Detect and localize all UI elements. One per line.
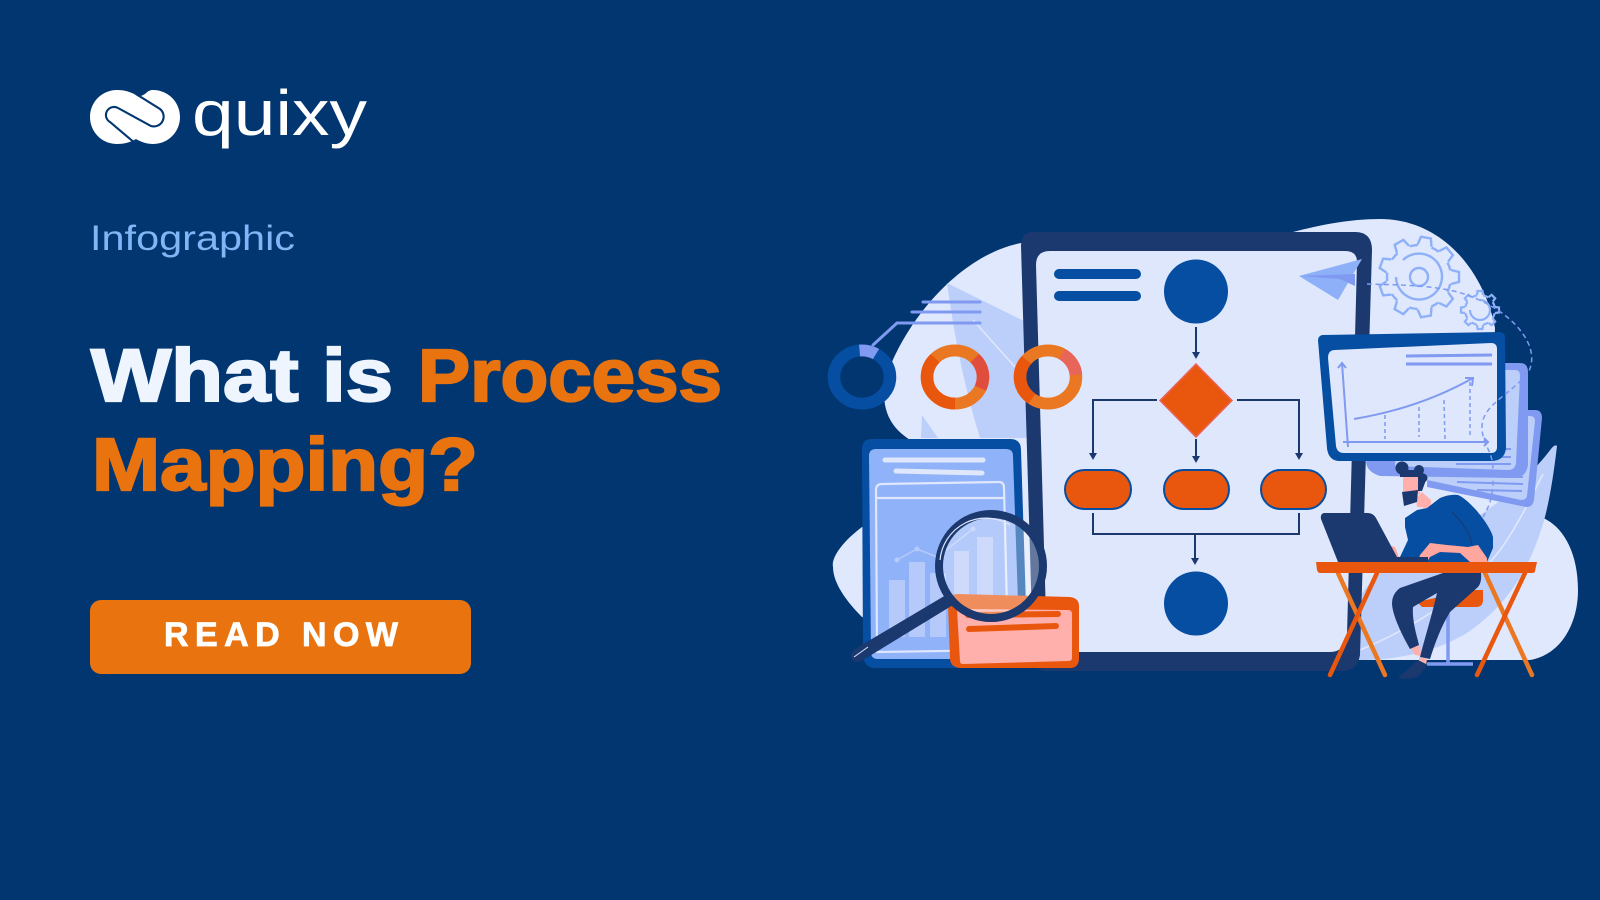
donut charts and leader lines bbox=[832, 302, 1087, 415]
beard bbox=[1402, 490, 1418, 506]
desk bbox=[1316, 562, 1537, 675]
flow end bbox=[1164, 572, 1228, 636]
logo: quixy bbox=[90, 77, 367, 149]
card: back right upper bbox=[1366, 363, 1528, 478]
gear: large bbox=[1379, 236, 1459, 318]
label: Infographic: Infographic bbox=[90, 219, 295, 258]
donut: orange salmon bbox=[1009, 340, 1087, 414]
panel: monitor line chart bbox=[1323, 337, 1501, 456]
leaf: upper left bbox=[921, 283, 1030, 438]
text lines bbox=[1054, 269, 1141, 301]
shoe bbox=[1398, 660, 1426, 679]
donut: blue bbox=[832, 348, 892, 406]
panel: left report tablet bbox=[862, 439, 1028, 668]
icon: quixy symbol bbox=[90, 90, 180, 144]
illustration: process mapping bbox=[832, 219, 1578, 679]
connectors bbox=[1093, 327, 1299, 558]
donut: orange red bbox=[915, 339, 995, 415]
icon: magnifying glass bbox=[851, 514, 1043, 662]
title: What is bbox=[91, 334, 393, 417]
flow start bbox=[1164, 260, 1228, 324]
title bbox=[91, 334, 722, 506]
leader lines bbox=[873, 302, 980, 345]
paper plane bbox=[1299, 259, 1362, 300]
face bbox=[1403, 477, 1420, 494]
decision diamond bbox=[1160, 364, 1232, 437]
flow pills bbox=[1065, 470, 1326, 509]
axes bbox=[1338, 363, 1488, 447]
card: orange note bbox=[948, 594, 1079, 668]
shirt bbox=[1397, 495, 1493, 562]
chart heading lines bbox=[1406, 355, 1492, 364]
wordmark: quixy bbox=[192, 77, 367, 149]
report frame bbox=[876, 482, 1008, 652]
ankles bbox=[1411, 645, 1427, 666]
button: read now bbox=[90, 600, 471, 674]
person at desk bbox=[1388, 462, 1493, 679]
hair bbox=[1396, 462, 1428, 491]
bar chart bbox=[889, 537, 993, 637]
legs bbox=[1392, 573, 1481, 659]
title: Process bbox=[418, 334, 722, 417]
background cloud bbox=[833, 219, 1578, 660]
report heading lines bbox=[885, 460, 983, 473]
card: back right lower bbox=[1427, 410, 1542, 507]
title: Mapping? bbox=[92, 423, 478, 506]
chair bbox=[1417, 590, 1483, 664]
panel: tablet flowchart bbox=[1021, 232, 1372, 671]
leaf: right bbox=[1360, 445, 1557, 660]
gear: small bbox=[1461, 291, 1499, 329]
trend line bbox=[897, 529, 973, 560]
button: read now: READ NOW bbox=[164, 616, 399, 654]
growth curve bbox=[1354, 378, 1473, 419]
dashed route bbox=[1367, 284, 1532, 517]
hand bbox=[1388, 545, 1399, 557]
laptop bbox=[1321, 513, 1428, 562]
arm bbox=[1418, 543, 1487, 562]
drop lines bbox=[1385, 382, 1470, 440]
neck bbox=[1416, 492, 1431, 508]
